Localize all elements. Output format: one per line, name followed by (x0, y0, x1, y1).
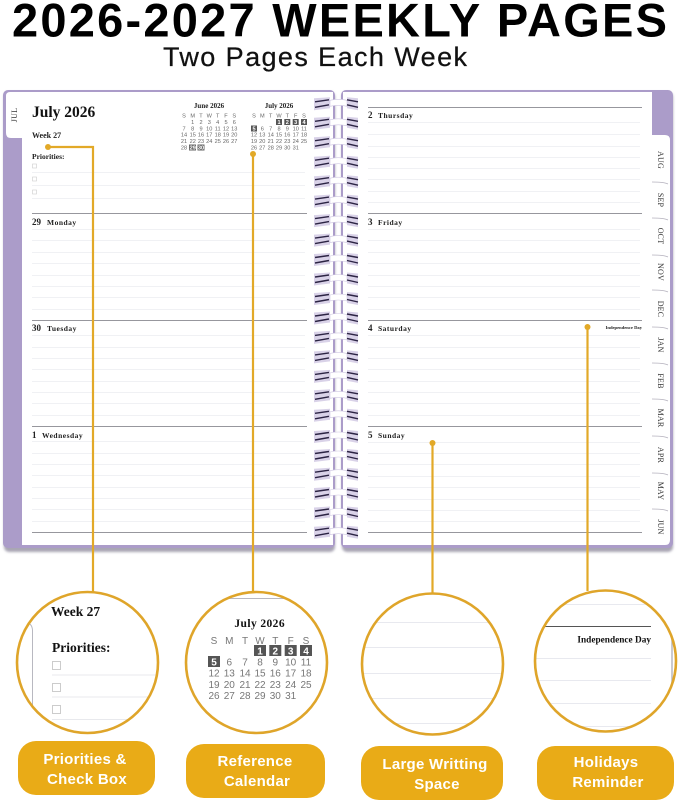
callout circle: reference calendar: 2 (273, 646, 279, 658)
mini calendar: July 2026: July 2026 (265, 102, 294, 110)
mini calendar: July 2026: 29 (276, 146, 282, 152)
month heading: July 2026 (32, 104, 96, 121)
month tabs: AUG (656, 151, 665, 169)
callout circle: reference calendar: 4 (303, 646, 309, 658)
callout circle: reference calendar: 27 (224, 691, 235, 702)
callout circle: reference calendar: 17 (285, 668, 297, 680)
mini calendar: July 2026: 17 (293, 133, 299, 139)
mini calendar: June 2026: T (216, 114, 220, 120)
callout circle: reference calendar: 6 (227, 658, 233, 668)
mini calendar: June 2026: 22 (190, 139, 196, 145)
callout circle: holidays: Independence Day (577, 636, 651, 646)
mini calendar: July 2026: 16 (284, 133, 290, 139)
month tabs: SEP (656, 193, 665, 208)
callout circle: reference calendar: T (242, 636, 248, 647)
day: Monday (32, 214, 307, 310)
mini calendar: June 2026: 19 (223, 133, 229, 139)
callout circle: reference calendar (186, 592, 327, 733)
month tabs: APR (656, 447, 665, 464)
button: Reference Calendar (186, 744, 325, 798)
callout circle: reference calendar: W (255, 636, 265, 647)
callout circle: reference calendar: 26 (208, 691, 220, 702)
mini calendar: June 2026: 2 (199, 120, 203, 126)
day: Saturday (368, 320, 643, 416)
mini calendar: June 2026: 8 (191, 126, 194, 132)
mini calendar: June 2026: 28 (181, 146, 187, 152)
mini calendar: July 2026: 9 (286, 126, 289, 132)
arrow: writing space connector (430, 440, 436, 594)
callout circle: priorities (17, 592, 160, 733)
panel: right planner page (341, 90, 673, 552)
arrow: priorities connector (45, 144, 93, 592)
callout circle: reference calendar: 31 (285, 691, 297, 702)
mini calendar: June 2026: 9 (199, 126, 203, 132)
callout circle: holidays (530, 590, 676, 732)
callout circle: reference calendar: 24 (285, 680, 297, 691)
callout circle: reference calendar: 8 (257, 658, 263, 668)
day: Wednesday (32, 426, 307, 532)
mini calendar: July 2026: 18 (301, 133, 307, 139)
mini calendar: June 2026: F (224, 114, 228, 120)
priorities list: Priorities: (32, 152, 64, 161)
callout circle: priorities: Priorities: (52, 640, 110, 655)
day: Thursday (368, 108, 642, 202)
day: Sunday: Sunday (378, 431, 405, 440)
mini calendar: June 2026: S (232, 114, 236, 120)
callout circle: reference calendar: 7 (242, 658, 248, 668)
month tabs (652, 135, 670, 545)
mini calendar: July 2026: S (252, 114, 256, 120)
day: Tuesday (32, 320, 307, 416)
callout circle: reference calendar: 22 (254, 680, 266, 691)
mini calendar: July 2026: 21 (268, 139, 274, 145)
arrow: calendar connector (250, 151, 256, 592)
mini calendar: July 2026: 11 (301, 126, 307, 132)
mini calendar: June 2026: 24 (206, 139, 212, 145)
day: Friday (368, 214, 642, 310)
week label: Week 27 (32, 131, 61, 140)
callout circle: reference calendar: 28 (239, 691, 251, 702)
mini calendar: June 2026: 12 (223, 126, 229, 132)
day: Tuesday: Tuesday (47, 324, 77, 333)
mini calendar: July 2026: 6 (261, 126, 264, 132)
callout circle: reference calendar: 19 (208, 680, 220, 691)
month tabs: OCT (656, 228, 665, 244)
callout circle: reference calendar: 18 (300, 668, 312, 680)
priorities list (32, 152, 305, 198)
mini calendar: June 2026: 27 (231, 139, 237, 145)
mini calendar: June 2026: 5 (224, 120, 228, 126)
day: Sunday: 5 (368, 430, 373, 440)
mini calendar: July 2026: 20 (259, 139, 265, 145)
callout circle: reference calendar: 9 (273, 658, 279, 668)
mini calendar: July 2026: 24 (293, 139, 299, 145)
callout circle: reference calendar: 30 (270, 691, 281, 702)
callout circle: reference calendar: 16 (270, 668, 281, 680)
mini calendar: June 2026: 14 (181, 133, 187, 139)
month tabs: JUN (656, 519, 665, 535)
panel: left planner page (3, 90, 335, 552)
mini calendar: July 2026: 1 (277, 120, 281, 126)
button: Priorities & Check Box: Priorities & (43, 751, 127, 768)
mini calendar: June 2026: 6 (233, 120, 236, 126)
callout circle: reference calendar: 23 (270, 680, 281, 691)
mini calendar: July 2026: 31 (293, 146, 299, 152)
button: Holidays Reminder: Reminder (572, 774, 644, 791)
mini calendar: July 2026: 15 (276, 133, 282, 139)
mini calendar: July 2026: 28 (268, 146, 274, 152)
mini calendar: July 2026: 30 (284, 146, 290, 152)
mini calendar: July 2026: W (276, 114, 282, 120)
month tabs: DEC (656, 301, 665, 317)
mini calendar: July 2026: 25 (301, 139, 307, 145)
month tabs: MAR (656, 409, 665, 428)
callout circle: reference calendar: 3 (288, 646, 294, 658)
mini calendar: June 2026: 11 (215, 126, 221, 132)
mini calendar: June 2026: 4 (216, 120, 219, 126)
callout circle: reference calendar: 15 (254, 668, 266, 680)
mini calendar: July 2026: T (269, 114, 273, 120)
callout circle: reference calendar: 5 (211, 658, 217, 668)
mini calendar: July 2026: 26 (251, 146, 257, 152)
callout circle: reference calendar: 29 (254, 691, 266, 702)
mini calendar: June 2026 (181, 102, 237, 152)
mini calendar: July 2026: 23 (284, 139, 290, 145)
button: Reference Calendar: Reference (218, 753, 292, 770)
callout circle: reference calendar: F (288, 636, 294, 647)
mini calendar: July 2026: 22 (276, 139, 282, 145)
button: Priorities & Check Box: Check Box (47, 771, 127, 788)
month tabs: NOV (656, 263, 665, 281)
button: Holidays Reminder: Holidays (574, 754, 638, 771)
callout circle: reference calendar: 21 (239, 680, 251, 691)
callout circle: reference calendar: 14 (239, 668, 251, 680)
button: Reference Calendar: Calendar (224, 773, 290, 790)
mini calendar: June 2026: 23 (198, 139, 204, 145)
tab: JUL (6, 92, 24, 138)
mini calendar: July 2026: 3 (294, 120, 297, 126)
mini calendar: June 2026: 17 (206, 133, 212, 139)
month tabs: FEB (656, 373, 665, 389)
mini calendar: July 2026: 13 (259, 133, 265, 139)
tab: JUL: JUL (10, 108, 19, 122)
callout circle: reference calendar: 25 (300, 680, 312, 691)
day: Friday: 3 (368, 217, 373, 227)
mini calendar: July 2026: 12 (251, 133, 257, 139)
holiday label: Independence Day (606, 325, 643, 330)
mini calendar: June 2026: 20 (231, 133, 237, 139)
callout circle: reference calendar: July 2026 (234, 618, 285, 630)
mini calendar: June 2026: 7 (182, 126, 186, 132)
day: Thursday: 2 (368, 110, 373, 120)
mini calendar: June 2026: 21 (181, 139, 187, 145)
callout circle: reference calendar: M (225, 636, 233, 647)
mini calendar: June 2026: 29 (190, 146, 196, 152)
mini calendar: June 2026: T (199, 114, 203, 120)
callout circle: reference calendar: 1 (257, 646, 263, 658)
callout circle: reference calendar: S (303, 636, 310, 647)
mini calendar: June 2026: 3 (208, 120, 211, 126)
mini calendar: July 2026: 27 (259, 146, 265, 152)
day: Friday: Friday (378, 218, 403, 227)
callout circle: reference calendar: 11 (301, 658, 312, 668)
callout circle: reference calendar: T (272, 636, 278, 647)
mini calendar: July 2026: T (286, 114, 290, 120)
callout circle: reference calendar: 10 (285, 658, 297, 668)
mini calendar: June 2026: 15 (190, 133, 196, 139)
month tabs: JAN (656, 337, 665, 353)
mini calendar: June 2026: 10 (206, 126, 212, 132)
mini calendar: June 2026: 1 (191, 120, 194, 126)
mini calendar: June 2026: 26 (223, 139, 229, 145)
day: Wednesday: Wednesday (42, 431, 83, 440)
button: Large Writting Space (361, 746, 503, 800)
mini calendar: June 2026: 25 (215, 139, 221, 145)
mini calendar: June 2026: 16 (198, 133, 204, 139)
mini calendar: June 2026: S (182, 114, 186, 120)
mini calendar: July 2026: 8 (277, 126, 281, 132)
subtitle: Two Pages Each Week (163, 42, 468, 72)
callout circle: reference calendar: 13 (224, 668, 235, 680)
callout circle: priorities: Week 27 (51, 604, 100, 619)
mini calendar: July 2026: 2 (286, 120, 289, 126)
mini calendar: June 2026: June 2026 (194, 102, 225, 110)
callout circle: reference calendar: S (211, 636, 218, 647)
button: Large Writting Space: Space (414, 776, 460, 793)
callout circle: reference calendar: 12 (208, 668, 220, 680)
day: Saturday: Saturday (378, 324, 412, 333)
month tabs: MAY (656, 482, 665, 500)
button: Holidays Reminder (537, 746, 674, 800)
mini calendar: July 2026: M (260, 114, 265, 120)
button: Large Writting Space: Large Writting (382, 756, 488, 773)
callout circle: reference calendar: 20 (224, 680, 235, 691)
day: Saturday: 4 (368, 323, 373, 333)
mini calendar: July 2026: 7 (269, 126, 272, 132)
mini calendar: July 2026: 4 (302, 120, 306, 126)
mini calendar: June 2026: 18 (215, 133, 221, 139)
day: Monday: Monday (47, 218, 77, 227)
day: Sunday (368, 426, 642, 532)
mini calendar: July 2026: 14 (268, 133, 274, 139)
day: Monday: 29 (32, 217, 42, 227)
spiral binding (314, 97, 358, 539)
mini calendar: July 2026: S (302, 114, 306, 120)
mini calendar: June 2026: 13 (231, 126, 237, 132)
mini calendar: July 2026: F (294, 114, 298, 120)
mini calendar: July 2026 (251, 102, 307, 152)
arrow: holidays connector (584, 324, 590, 591)
button: Priorities & Check Box (18, 741, 155, 795)
mini calendar: June 2026: M (190, 114, 195, 120)
mini calendar: July 2026: 19 (251, 139, 257, 145)
day: Wednesday: 1 (32, 430, 37, 440)
callout circle: large writing space (360, 594, 505, 734)
mini calendar: June 2026: W (207, 114, 213, 120)
day: Tuesday: 30 (32, 323, 42, 333)
mini calendar: June 2026: 30 (198, 146, 204, 152)
mini calendar: July 2026: 5 (252, 126, 256, 132)
day: Thursday: Thursday (378, 111, 413, 120)
mini calendar: July 2026: 10 (293, 126, 299, 132)
